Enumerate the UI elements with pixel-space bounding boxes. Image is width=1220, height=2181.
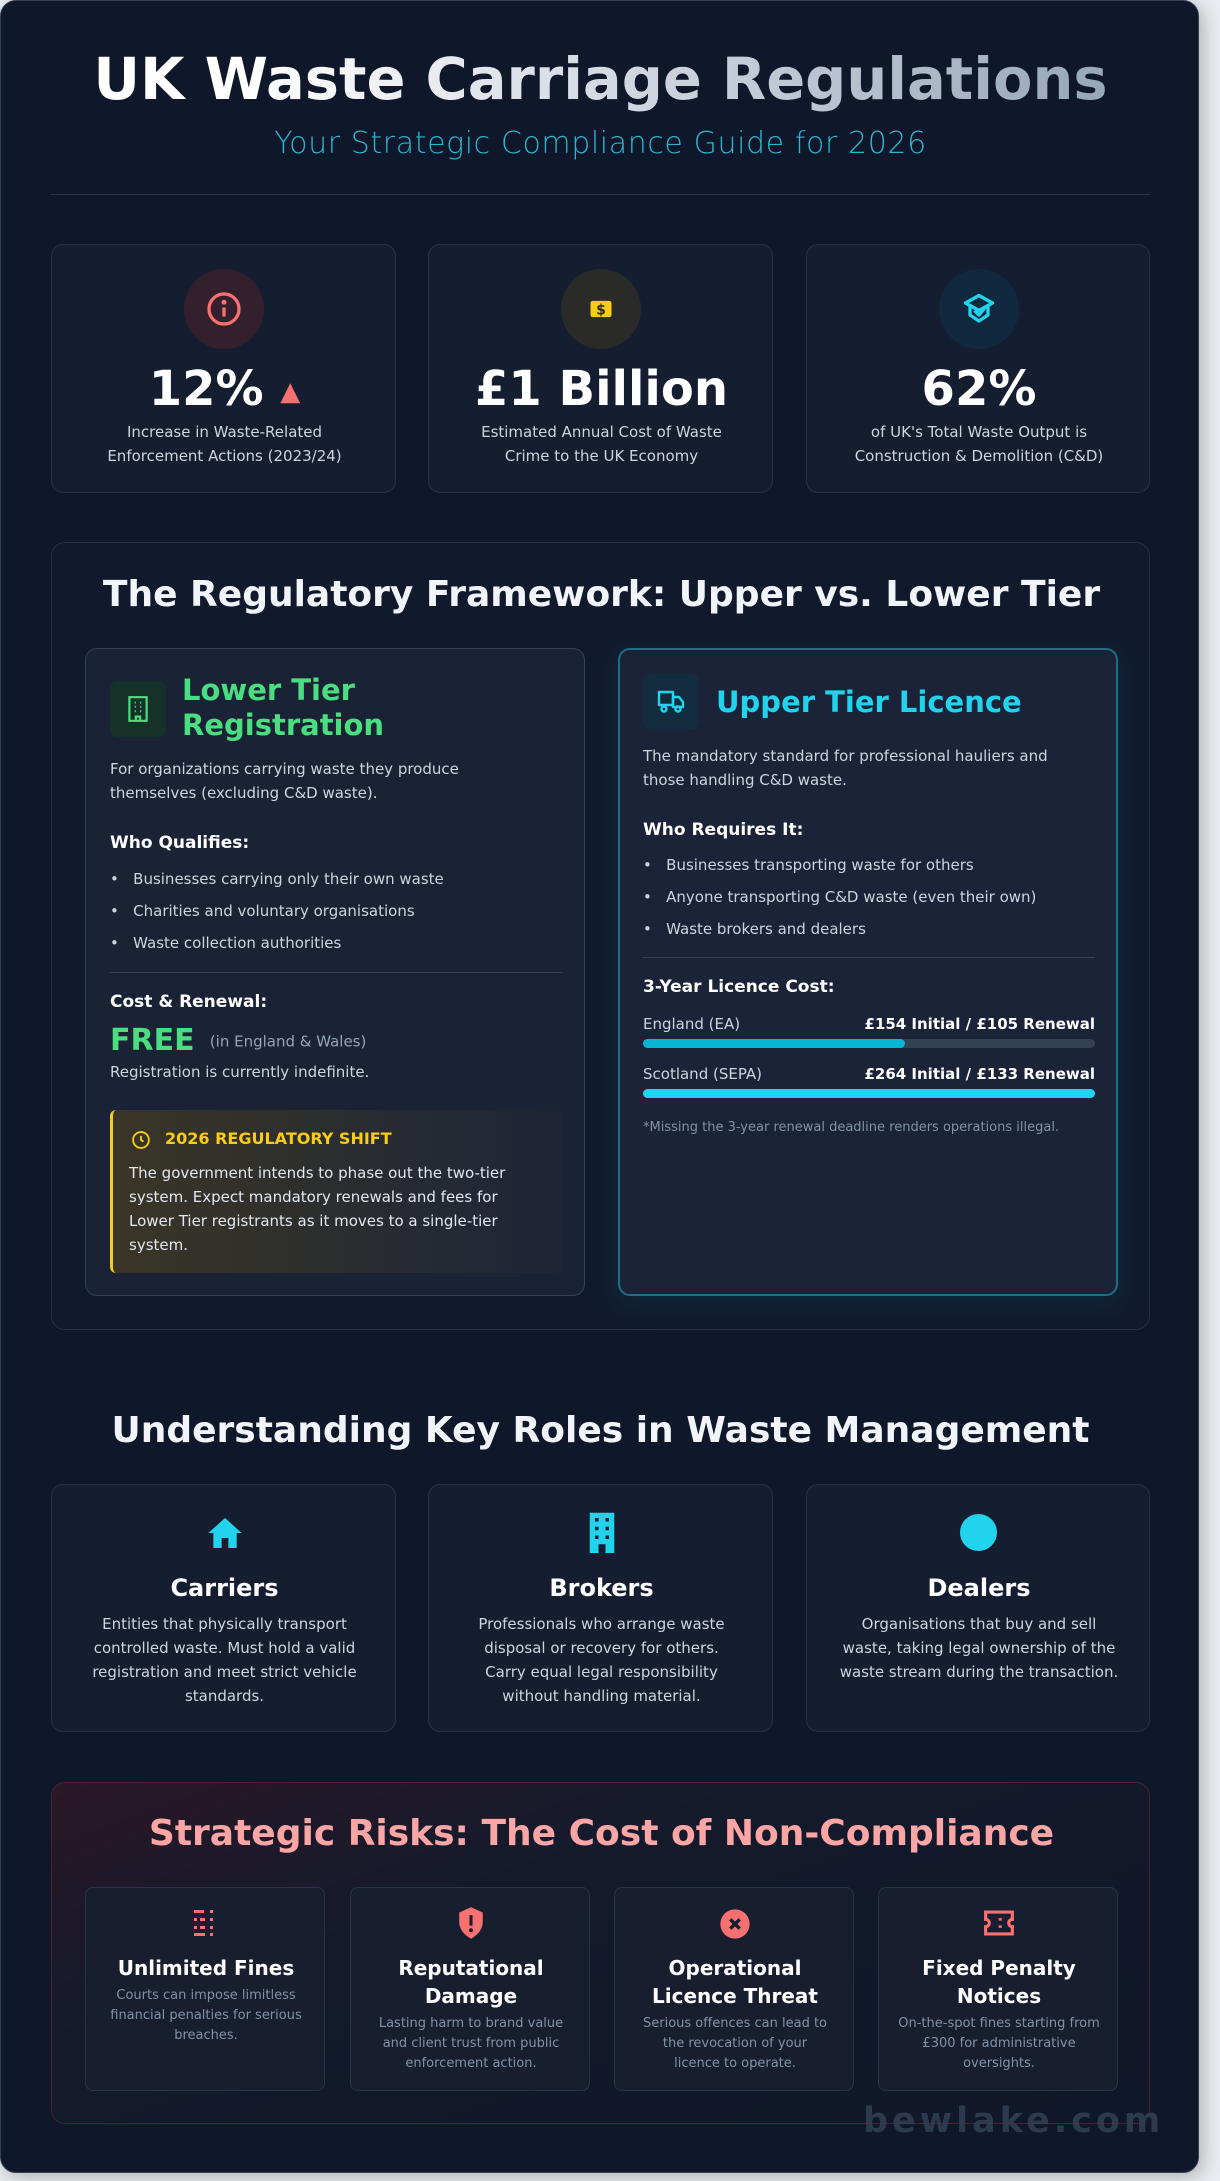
risk card: licence threat — [614, 1887, 854, 2091]
cost heading: 3-Year Licence Cost: — [643, 977, 835, 997]
bullet list: • Charities and voluntary organisations — [110, 902, 415, 920]
number: 62% — [922, 361, 1036, 417]
description: themselves (excluding C&D waste). — [110, 784, 377, 802]
bullet list: • Waste collection authorities — [110, 934, 341, 952]
bar chart: scotland: Scotland (SEPA) — [643, 1065, 762, 1083]
watermark: bewlake.com — [863, 2101, 1164, 2141]
description: of UK's Total Waste Output is — [871, 423, 1087, 441]
risk card: licence threat: Serious offences can lead to the revocation of your licence to operate. — [643, 2016, 827, 2071]
bullet list: • Waste brokers and dealers — [643, 920, 866, 938]
tier title: Upper Tier Licence — [716, 685, 1022, 719]
role card: carriers: Entities that physically transport controlled waste. Must hold a valid registration and meet strict vehicle standards. — [92, 1615, 357, 1705]
role card: carriers: Carriers — [170, 1574, 279, 1602]
icon: truck — [643, 674, 699, 730]
risk card: licence threat: Operational — [668, 1956, 802, 1980]
number: £1 Billion — [475, 361, 728, 417]
bullet list — [110, 870, 444, 952]
risk card: fixed penalty: Notices — [957, 1984, 1041, 2008]
icon: list — [194, 1910, 213, 1936]
callout: 2026 shift — [110, 1110, 562, 1273]
panel: upper tier — [618, 648, 1118, 1296]
description — [642, 747, 1048, 789]
panel: lower tier — [85, 648, 585, 1296]
tier title: Registration — [182, 708, 384, 742]
panel: regulatory framework — [51, 542, 1150, 1330]
icon: shield — [459, 1907, 483, 1939]
bar chart: england: England (EA) — [643, 1015, 740, 1033]
bar chart: england: £154 Initial / £105 Renewal — [864, 1015, 1095, 1033]
stat card: £1 Billion — [428, 244, 773, 493]
icon: cap — [939, 269, 1019, 349]
risk card: unlimited fines — [85, 1887, 325, 2091]
footnote: *Missing the 3-year renewal deadline renders operations illegal. — [643, 1120, 1059, 1135]
description: The mandatory standard for professional hauliers and — [643, 747, 1048, 765]
heading: The Regulatory Framework: Upper vs. Lower Tier — [103, 574, 1100, 615]
panel: strategic risks — [51, 1782, 1150, 2124]
callout: 2026 shift: 2026 REGULATORY SHIFT — [165, 1129, 392, 1148]
description: Construction & Demolition (C&D) — [855, 447, 1103, 465]
description — [107, 423, 342, 465]
risk card: fixed penalty — [878, 1887, 1118, 2091]
stat card: 62% — [806, 244, 1150, 493]
icon: building — [590, 1512, 614, 1553]
risk card: fixed penalty: On-the-spot fines starting from £300 for administrative oversights. — [898, 2016, 1100, 2071]
icon: info — [184, 269, 264, 349]
bullet list: • Anyone transporting C&D waste (even their own) — [643, 888, 1036, 906]
icon: building — [110, 681, 166, 737]
icon: ticket — [984, 1910, 1014, 1936]
risk card: unlimited fines: Unlimited Fines — [118, 1956, 294, 1980]
bullet list: • Businesses carrying only their own waste — [110, 870, 444, 888]
tier title: Lower Tier — [182, 673, 355, 707]
bar chart: england — [643, 1015, 1095, 1048]
role card: brokers: Professionals who arrange waste disposal or recovery for others. Carry equal legal responsibility without handling material. — [478, 1615, 725, 1705]
cost heading: Cost & Renewal: — [110, 992, 267, 1012]
description: those handling C&D waste. — [643, 771, 847, 789]
title: UK Waste Carriage Regulations — [93, 46, 1108, 113]
stat card: 12% — [51, 244, 396, 493]
heading: key roles: Understanding Key Roles in Waste Management — [111, 1410, 1090, 1451]
role card: brokers — [428, 1484, 773, 1732]
description: Estimated Annual Cost of Waste — [481, 423, 722, 441]
icon: coin — [960, 1514, 997, 1551]
icon: clock — [132, 1131, 150, 1149]
description — [110, 760, 459, 802]
bullet list: • Businesses transporting waste for others — [643, 856, 974, 874]
risk card: fixed penalty: Fixed Penalty — [922, 1956, 1076, 1980]
description — [855, 423, 1103, 465]
risk card: unlimited fines: Courts can impose limitless financial penalties for serious breaches. — [110, 1988, 302, 2043]
risk card: reputational damage: Reputational — [398, 1956, 544, 1980]
icon: money — [561, 269, 641, 349]
callout: 2026 shift: The government intends to phase out the two-tier system. Expect mandatory renewals and fees for Lower Tier registrants as it moves to a single-tier system. — [129, 1164, 505, 1254]
role card: dealers — [806, 1484, 1150, 1732]
icon: money: $ — [596, 302, 606, 318]
who requires: Who Requires It: — [643, 820, 803, 840]
tier title — [182, 673, 384, 742]
icon: x circle — [720, 1909, 750, 1939]
heading: Strategic Risks: The Cost of Non-Compliance — [149, 1813, 1054, 1854]
description: Increase in Waste-Related — [127, 423, 322, 441]
risk card: reputational damage: Lasting harm to brand value and client trust from public enforcement action. — [379, 2016, 563, 2071]
role card: brokers: Brokers — [549, 1574, 654, 1602]
free: FREE (in England & Wales) — [110, 1023, 366, 1058]
role card: carriers — [51, 1484, 396, 1732]
number: 12% ▲ — [149, 361, 300, 417]
risk card: reputational damage — [350, 1887, 590, 2091]
description: Enforcement Actions (2023/24) — [107, 447, 342, 465]
description: Crime to the UK Economy — [505, 447, 698, 465]
icon: house — [208, 1518, 242, 1548]
risk card: licence threat: Licence Threat — [652, 1984, 818, 2008]
bar chart: scotland: £264 Initial / £133 Renewal — [864, 1065, 1095, 1083]
role card: dealers: Organisations that buy and sell waste, taking legal ownership of the waste stream during the transaction. — [840, 1615, 1118, 1681]
description — [481, 423, 722, 465]
role card: dealers: Dealers — [927, 1574, 1031, 1602]
description: For organizations carrying waste they produce — [110, 760, 459, 778]
subtitle: Your Strategic Compliance Guide for 2026 — [274, 126, 927, 161]
bar chart: scotland — [643, 1065, 1095, 1098]
renewal note: Registration is currently indefinite. — [110, 1063, 369, 1081]
bullet list — [643, 856, 1036, 938]
risk card: reputational damage: Damage — [425, 1984, 517, 2008]
who qualifies: Who Qualifies: — [110, 833, 249, 853]
